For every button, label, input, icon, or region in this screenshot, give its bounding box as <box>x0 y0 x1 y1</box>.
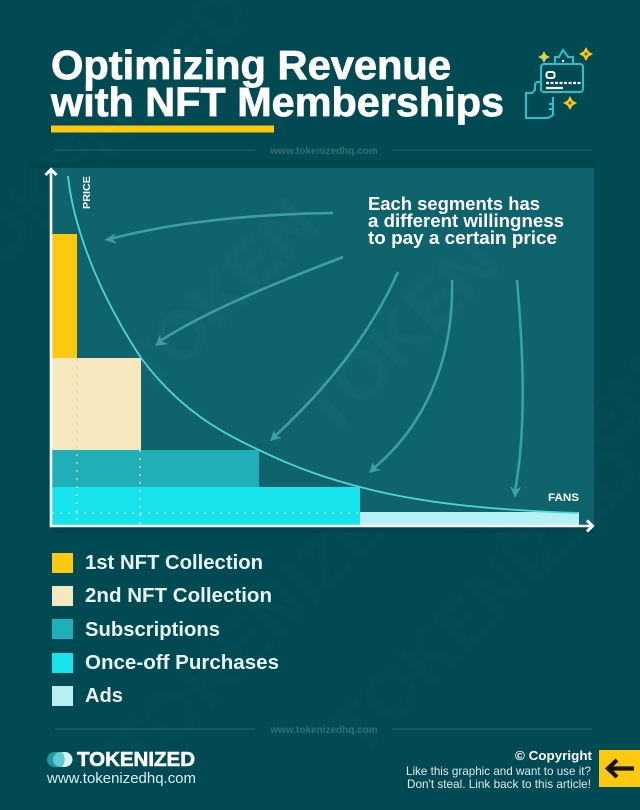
copyright note: Like this graphic and want to use it? <box>406 764 591 778</box>
footer divider: www.tokenizedhq.com <box>269 725 378 736</box>
axes <box>46 170 592 532</box>
copyright note: © Copyright <box>515 748 593 763</box>
legend item: 2nd NFT collection: 2nd NFT Collection <box>85 585 272 607</box>
logo <box>46 749 196 787</box>
title <box>50 42 504 125</box>
legend item: once-off purchases: Once-off Purchases <box>85 652 279 674</box>
legend <box>52 552 279 707</box>
bar: once-off purchases <box>52 487 360 525</box>
axis label: fans: FANS <box>548 492 579 504</box>
title underline <box>51 126 274 132</box>
logo: TOKENIZED <box>77 749 195 771</box>
copyright note: Don't steal. Link back to this article! <box>407 777 591 791</box>
bar: ads <box>360 512 579 525</box>
arrows: willingness to pay <box>104 213 523 498</box>
callout <box>368 194 564 248</box>
legend item: subscriptions: Subscriptions <box>85 619 220 641</box>
callout: a different willingness <box>368 211 564 231</box>
logo: www.tokenizedhq.com <box>46 770 196 787</box>
icon: back arrow button <box>599 750 640 787</box>
title: with NFT Memberships <box>50 79 504 125</box>
axis label: price: PRICE <box>81 176 93 209</box>
chart panel <box>30 162 594 533</box>
icon: NFT membership card in hand <box>526 47 593 118</box>
copyright note <box>406 748 593 791</box>
bar: 2nd NFT collection <box>52 358 141 450</box>
demand curve <box>68 176 579 513</box>
legend item: ads <box>52 685 123 707</box>
callout: Each segments has <box>368 194 540 214</box>
dotted guide lines <box>52 358 360 524</box>
header divider: www.tokenizedhq.com <box>269 146 378 157</box>
legend item: ads: Ads <box>85 685 123 707</box>
title: Optimizing Revenue <box>51 42 451 88</box>
bar: 1st NFT collection <box>52 234 77 358</box>
callout: to pay a certain price <box>368 228 557 248</box>
legend item: 1st NFT collection: 1st NFT Collection <box>85 552 263 574</box>
bar: subscriptions <box>52 450 259 487</box>
